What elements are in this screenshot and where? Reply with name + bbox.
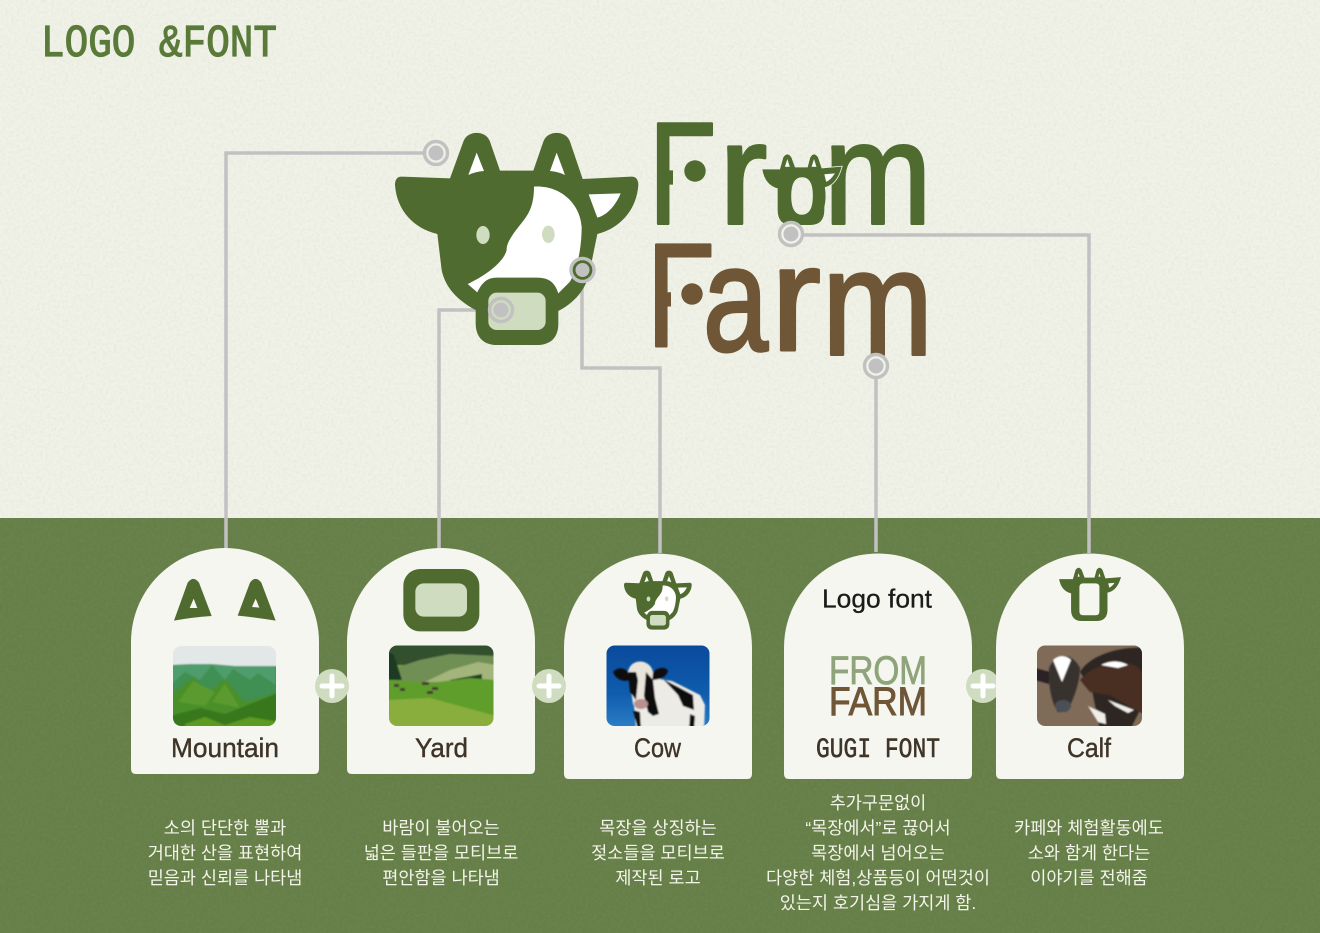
- green lower band: [0, 518, 1320, 933]
- description: calf: [1014, 818, 1164, 888]
- label: GUGI FONT: GUGI FONT: [816, 735, 940, 766]
- node: cow: [571, 258, 594, 282]
- connector: logo font: [874, 378, 878, 552]
- description: logo font: “목장에서”로 끊어서: [805, 818, 951, 838]
- plus: mountain and yard: [315, 669, 349, 703]
- connector: calf: [803, 235, 1089, 553]
- logo: cow head: [395, 133, 638, 345]
- letter F: F: [649, 93, 716, 255]
- description: yard: [364, 818, 518, 888]
- description: yard: 편안함을 나타냄: [382, 868, 500, 888]
- node: yard: [490, 298, 512, 322]
- small cow as letter o: [762, 131, 842, 246]
- font sample: FARM: FARM: [829, 680, 927, 724]
- panel: calf: [996, 554, 1184, 779]
- description: mountain: 소의 단단한 뿔과: [164, 818, 286, 838]
- logo wordmark: From: m: [824, 94, 932, 255]
- panel: yard: [347, 548, 535, 774]
- description: cow: [591, 818, 725, 888]
- description: calf: 소와 함게 한다는: [1028, 843, 1150, 863]
- node: calf: [780, 222, 802, 246]
- description: logo font: [766, 793, 990, 913]
- logo wordmark: From: r: [719, 92, 767, 254]
- plus: font and calf: [966, 669, 1000, 703]
- label: Calf: Calf: [1067, 733, 1111, 763]
- panel: logo font: [784, 554, 972, 779]
- description: cow: 젖소들을 모티브로: [591, 843, 725, 863]
- description: mountain: [148, 818, 302, 888]
- description: mountain: 거대한 산을 표현하여: [148, 843, 302, 863]
- paper background: [0, 0, 1320, 518]
- icon: cow tag: [403, 569, 479, 631]
- photo: holstein cow: [606, 645, 710, 730]
- letter F: F: [647, 213, 715, 378]
- description: cow: 제작된 로고: [615, 868, 701, 888]
- node: mountain: [424, 142, 448, 164]
- description: calf: 카페와 체험활동에도: [1014, 818, 1164, 838]
- logo wordmark: From: [656, 122, 924, 225]
- title: LOGO &FONT: [41, 19, 277, 70]
- description: logo font: 추가구문없이: [830, 793, 926, 813]
- node: logo font: [864, 354, 888, 378]
- font sample: FROM: FROM: [829, 649, 927, 693]
- logo wordmark: Farm: m: [822, 219, 933, 387]
- label: Mountain: Mountain: [171, 733, 279, 763]
- description: logo font: 있는지 호기심을 가지게 함.: [780, 893, 976, 913]
- photo: calves: [1035, 645, 1145, 730]
- description: yard: 바람이 불어오는: [382, 818, 500, 838]
- logo wordmark: Farm: [655, 243, 926, 356]
- logo wordmark: Farm: r: [771, 214, 821, 382]
- connector: mountain: [226, 153, 424, 548]
- connector: yard: [439, 310, 490, 548]
- heading: Logo font: Logo font: [822, 584, 933, 614]
- label: Cow: Cow: [634, 733, 681, 763]
- panel: cow: [564, 554, 752, 779]
- icon: mountain horns: [174, 579, 276, 621]
- description: calf: 이야기를 전해줌: [1030, 868, 1148, 888]
- icon: cow logo: [624, 571, 692, 630]
- logo wordmark: Farm: a: [703, 214, 768, 383]
- description: logo font: 목장에서 넘어오는: [811, 843, 945, 863]
- description: yard: 넓은 들판을 모티브로: [364, 843, 518, 863]
- small cow as letter o: o: [775, 131, 829, 246]
- icon: small cow: [1059, 568, 1121, 621]
- photo: grazing yard: [389, 646, 494, 726]
- label: Yard: Yard: [415, 733, 468, 763]
- plus: yard and cow: [532, 669, 566, 703]
- photo: green mountains: [173, 646, 276, 726]
- connector: cow: [582, 282, 660, 553]
- description: logo font: 다양한 체험,상품등이 어떤것이: [766, 868, 990, 888]
- panel: mountain: [131, 548, 319, 774]
- description: cow: 목장을 상징하는: [599, 818, 717, 838]
- description: mountain: 믿음과 신뢰를 나타냄: [148, 868, 302, 888]
